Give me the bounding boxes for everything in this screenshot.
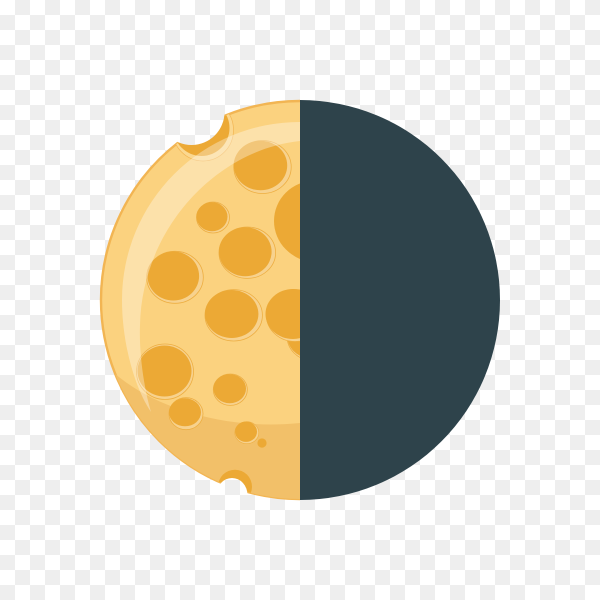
craters <box>136 114 300 493</box>
lower shadow <box>116 374 300 499</box>
crater: bottom bitten <box>219 470 252 493</box>
top bite <box>158 79 224 145</box>
moon base disc <box>100 100 300 500</box>
crater: tiny <box>257 438 267 448</box>
crater: lower middle <box>213 374 247 405</box>
dark half of moon <box>300 100 500 500</box>
crater: middle <box>205 290 262 341</box>
crater: right lower secondary <box>287 340 300 358</box>
crater: bottom small <box>235 422 259 444</box>
crater: right lower <box>266 289 300 342</box>
crater: left <box>147 251 203 303</box>
crater: top <box>234 140 291 194</box>
bottom bite <box>216 478 248 512</box>
crater: lower <box>169 398 203 430</box>
crater: top bitten <box>176 114 234 162</box>
highlight band <box>122 122 300 412</box>
crater: lower left large <box>136 344 194 399</box>
crater: large right upper <box>274 184 300 259</box>
crater: centre <box>219 227 276 278</box>
crater: small upper <box>196 202 230 233</box>
lit half of moon <box>100 100 300 500</box>
